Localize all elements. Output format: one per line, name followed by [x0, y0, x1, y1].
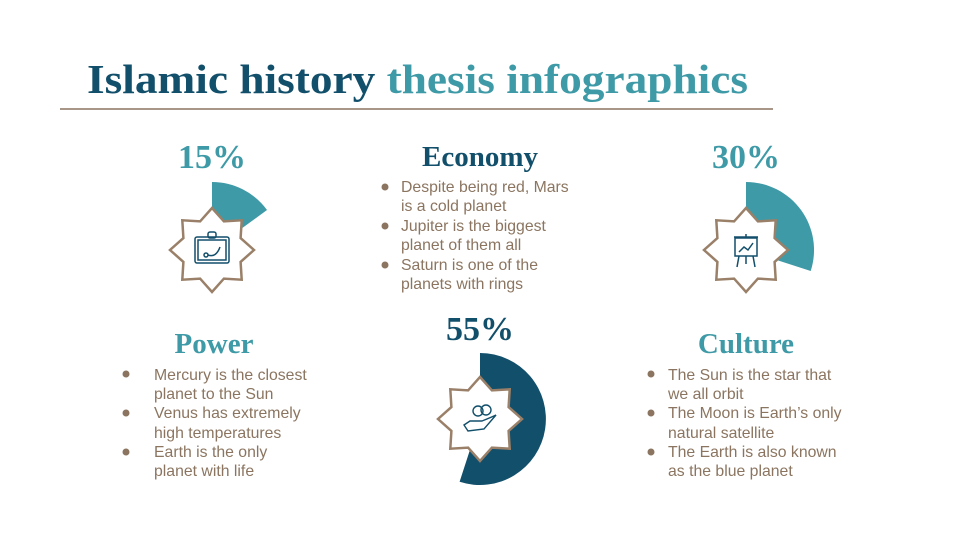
section: Economy: is a cold planet — [401, 198, 507, 215]
section: Power: planet with life — [154, 463, 254, 480]
section: Culture: The Sun is the star that — [668, 367, 832, 384]
section: Power: planet to the Sun — [154, 386, 273, 403]
section: Culture: Culture — [698, 328, 794, 360]
chart: 15% — [170, 139, 267, 292]
section: Economy: planets with rings — [401, 276, 523, 293]
section: Economy: Despite being red, Mars — [401, 179, 569, 196]
section: Power: Earth is the only — [154, 444, 267, 461]
section: Power: high temperatures — [154, 425, 281, 442]
chart: 55%: 55% — [446, 311, 514, 348]
section: Culture: natural satellite — [668, 425, 774, 442]
title: Islamic history thesis infographics — [87, 56, 748, 102]
section: Culture: as the blue planet — [668, 463, 793, 480]
section: Culture: we all orbit — [667, 386, 744, 403]
section: Power: Mercury is the closest — [154, 367, 307, 384]
icon: hand with coins — [464, 405, 496, 431]
section: Economy: Economy — [422, 141, 538, 173]
section: Economy — [382, 141, 569, 293]
chart: 55% — [438, 311, 546, 485]
chart: 30% — [704, 139, 814, 292]
section: Economy: planet of them all — [401, 237, 521, 254]
section: Economy: Jupiter is the biggest — [401, 218, 546, 235]
section: Culture: The Earth is also known — [668, 444, 837, 461]
icon: presentation board — [734, 234, 758, 267]
chart: 30%: 30% — [712, 139, 780, 176]
section: Culture: The Moon is Earth’s only — [668, 405, 842, 422]
section: Power: Venus has extremely — [154, 405, 301, 422]
section: Power — [122, 328, 307, 480]
section: Power: Power — [175, 328, 254, 360]
icon: tactics board — [195, 232, 229, 263]
section: Culture — [648, 328, 842, 480]
section: Economy: Saturn is one of the — [401, 257, 538, 274]
chart: 15%: 15% — [178, 139, 246, 176]
